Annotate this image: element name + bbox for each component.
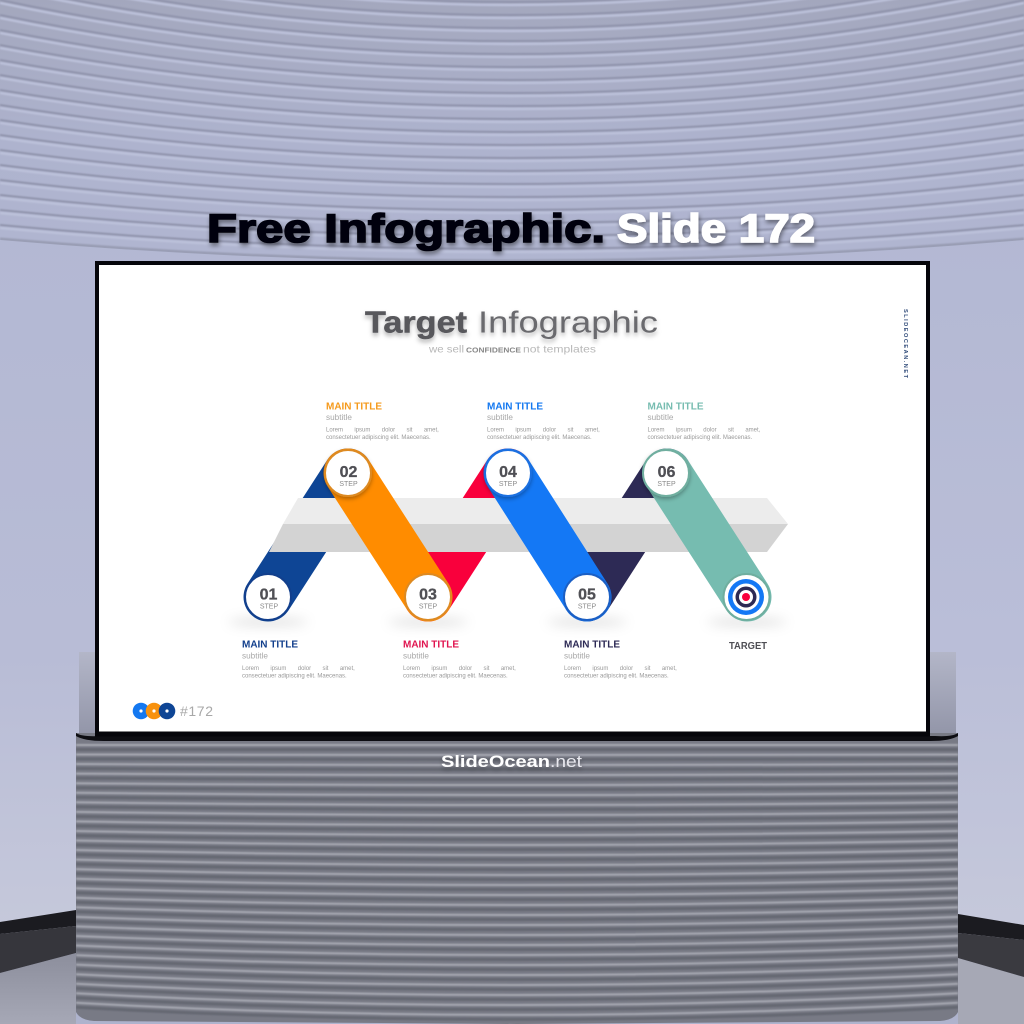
- pedestal behind screen: [79, 652, 956, 736]
- text block: step 02: MAIN TITLE: [326, 400, 382, 412]
- text block: step 02: consectetuer adipiscing elit. Maecenas.: [326, 435, 431, 441]
- step 02: STEP: [339, 481, 358, 488]
- slide title: Target: [365, 304, 467, 340]
- floor and skirting, left: [0, 910, 76, 1024]
- footer brand: .net: [550, 752, 582, 771]
- step 03: [405, 574, 451, 620]
- text block: step 04: MAIN TITLE: [487, 400, 543, 412]
- header headline: [207, 207, 815, 251]
- slide title: Infographic: [478, 304, 658, 340]
- text block: step 03: Lorem ipsum dolor sit amet,: [403, 666, 516, 672]
- text block: step 01: subtitle: [242, 652, 268, 660]
- target label: TARGET: [729, 640, 768, 652]
- text block: step 05: MAIN TITLE: [564, 638, 620, 650]
- header headline: Slide 172: [617, 207, 815, 251]
- footer brand: [441, 752, 582, 771]
- text block: step 02: Lorem ipsum dolor sit amet,: [326, 428, 439, 434]
- text block: step 05: Lorem ipsum dolor sit amet,: [564, 666, 677, 672]
- icon: target: [724, 574, 770, 620]
- text block: step 03: [403, 638, 516, 680]
- footer logo circles: [133, 703, 175, 719]
- text block: step 04: consectetuer adipiscing elit. Maecenas.: [487, 435, 592, 441]
- vertical brand label: SLIDEOCEAN.NET: [902, 309, 908, 379]
- text block: step 04: subtitle: [487, 413, 513, 422]
- step 03: 03: [419, 586, 437, 604]
- step 03: STEP: [419, 604, 437, 610]
- text block: step 06: [648, 400, 761, 441]
- text block: step 03: MAIN TITLE: [403, 638, 459, 650]
- text block: step 05: consectetuer adipiscing elit. Maecenas.: [564, 674, 669, 680]
- footer brand: SlideOcean: [441, 752, 550, 771]
- text block: step 06: MAIN TITLE: [648, 400, 704, 412]
- curved ribbed ceiling: [0, 0, 1024, 290]
- text block: step 01: MAIN TITLE: [242, 638, 298, 650]
- step 05: [564, 574, 610, 620]
- step 06: 06: [658, 464, 676, 481]
- step 02: 02: [340, 464, 358, 481]
- text block: step 01: [242, 638, 355, 680]
- floor and skirting, right: [958, 914, 1024, 1024]
- shadows under circles: [228, 619, 787, 625]
- text block: step 01: Lorem ipsum dolor sit amet,: [242, 666, 355, 672]
- step 01: 01: [260, 586, 278, 604]
- step 05: STEP: [578, 604, 596, 610]
- central grey arrow: [269, 498, 788, 552]
- slide subtitle: [428, 344, 596, 356]
- step 02: [325, 450, 371, 496]
- text block: step 01: consectetuer adipiscing elit. Maecenas.: [242, 674, 347, 680]
- step 06: STEP: [657, 481, 676, 488]
- slide title: [365, 304, 658, 340]
- step 04: STEP: [499, 481, 517, 488]
- text block: step 06: subtitle: [648, 413, 674, 422]
- text block: step 02: [326, 400, 439, 441]
- room background wall: [0, 220, 1024, 940]
- text block: step 06: Lorem ipsum dolor sit amet,: [648, 428, 761, 434]
- slide subtitle: we sell: [428, 344, 464, 356]
- step 04: 04: [499, 464, 517, 481]
- step 01: [245, 574, 291, 620]
- text block: step 04: [487, 400, 600, 441]
- text block: step 03: consectetuer adipiscing elit. Maecenas.: [403, 674, 508, 680]
- text block: step 05: [564, 638, 677, 680]
- step 04: [485, 450, 531, 496]
- back ribbons: [268, 473, 667, 597]
- front ribbons: [348, 473, 747, 597]
- slide subtitle: not templates: [523, 344, 596, 356]
- text block: step 04: Lorem ipsum dolor sit amet,: [487, 428, 600, 434]
- text block: step 06: consectetuer adipiscing elit. Maecenas.: [648, 435, 753, 441]
- screen frame: [95, 261, 930, 736]
- step 05: 05: [578, 586, 596, 604]
- text block: step 02: subtitle: [326, 413, 352, 422]
- slide number: #172: [180, 703, 213, 719]
- step 01: STEP: [260, 604, 278, 610]
- ribbed desk: [70, 730, 965, 1024]
- slide panel: [99, 265, 926, 732]
- step 06: [643, 450, 689, 496]
- text block: step 05: subtitle: [564, 652, 590, 660]
- header headline: Free Infographic.: [207, 207, 605, 251]
- text block: step 03: subtitle: [403, 652, 429, 660]
- slide subtitle: CONFIDENCE: [466, 346, 521, 354]
